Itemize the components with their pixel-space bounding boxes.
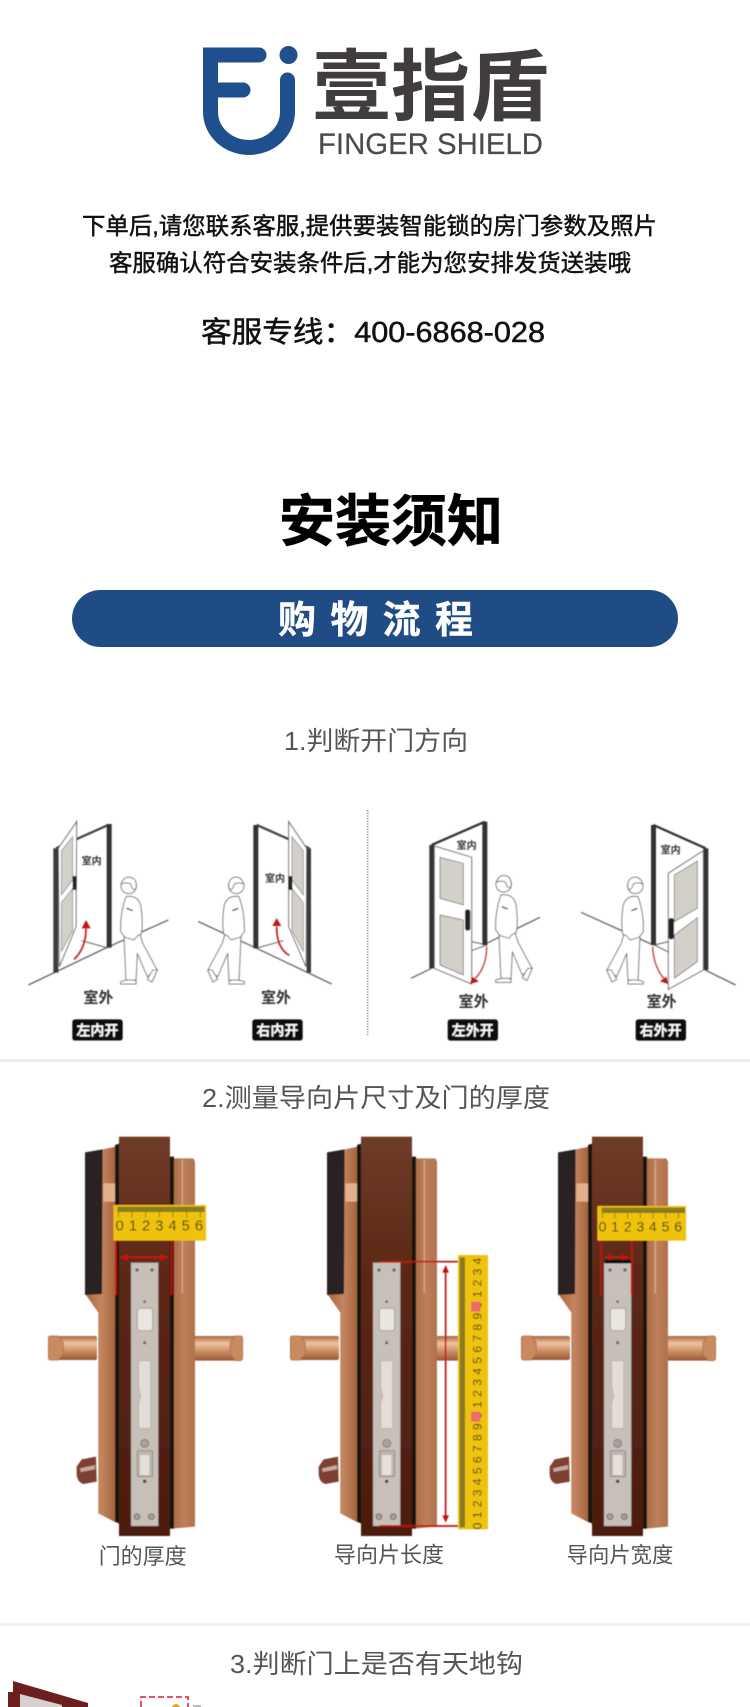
door: right inward [198,822,332,1041]
dashed callout box [141,1697,188,1707]
intro text [82,213,657,276]
door: right inward: 右内开 [256,1022,298,1038]
door: left outward [411,822,540,1041]
logo [210,43,549,161]
title: 安装须知 [279,490,503,553]
step 3 heading: 3.判断门上是否有天地钩 [230,1649,523,1679]
door: left outward: 左外开 [452,1022,494,1038]
door: left outward: 室内 [457,839,477,852]
icon: FJ logo mark [210,46,298,147]
yellow ruler: 0123456 [599,1218,682,1234]
door: right outward [581,825,736,1041]
door: left outward: 室外 [459,993,489,1011]
label: door thickness: 门的厚度 [99,1544,187,1569]
yellow ruler [597,1206,686,1241]
intro line 1: 下单后,请您联系客服,提供要装智能锁的房门参数及照片 [82,213,657,239]
lock: strike plate length [290,1137,488,1567]
door: left inward: 室外 [83,989,113,1007]
door: right outward: 右外开 [640,1022,682,1038]
label: strike plate length: 导向片长度 [334,1542,444,1567]
vertical yellow ruler [458,1255,488,1529]
yellow ruler [113,1205,206,1241]
shopping process banner [72,590,678,647]
door frame partial image [8,1681,201,1707]
step 2 heading: 2.测量导向片尺寸及门的厚度 [202,1083,550,1113]
panel: lock measurement [48,1137,716,1569]
yellow ruler: 0123456 [116,1218,203,1234]
logo english name: FINGER SHIELD [318,128,543,161]
door: right outward: 室外 [647,993,677,1011]
door: left inward: 左内开 [76,1022,118,1038]
door: right inward: 室内 [265,872,285,885]
lock: door thickness [48,1137,243,1569]
logo wordmark: 壹指盾 [312,43,549,131]
door: right inward: 室外 [261,989,291,1007]
banner label: 购 物 流 程 [278,600,473,642]
panel: door opening directions [28,810,736,1041]
door: left inward: 室内 [82,855,102,868]
step 1 heading: 1.判断开门方向 [284,726,468,756]
intro line 2: 客服确认符合安装条件后,才能为您安排发货送装哦 [109,250,631,276]
door: right outward: 室内 [661,843,681,856]
label: strike plate width: 导向片宽度 [567,1543,673,1567]
vertical yellow ruler: 0123456789012345678901234 [470,1257,484,1529]
lock: strike plate width [521,1137,716,1567]
door: left inward [28,822,168,1041]
service hotline: 客服专线：400-6868-028 [201,316,545,349]
